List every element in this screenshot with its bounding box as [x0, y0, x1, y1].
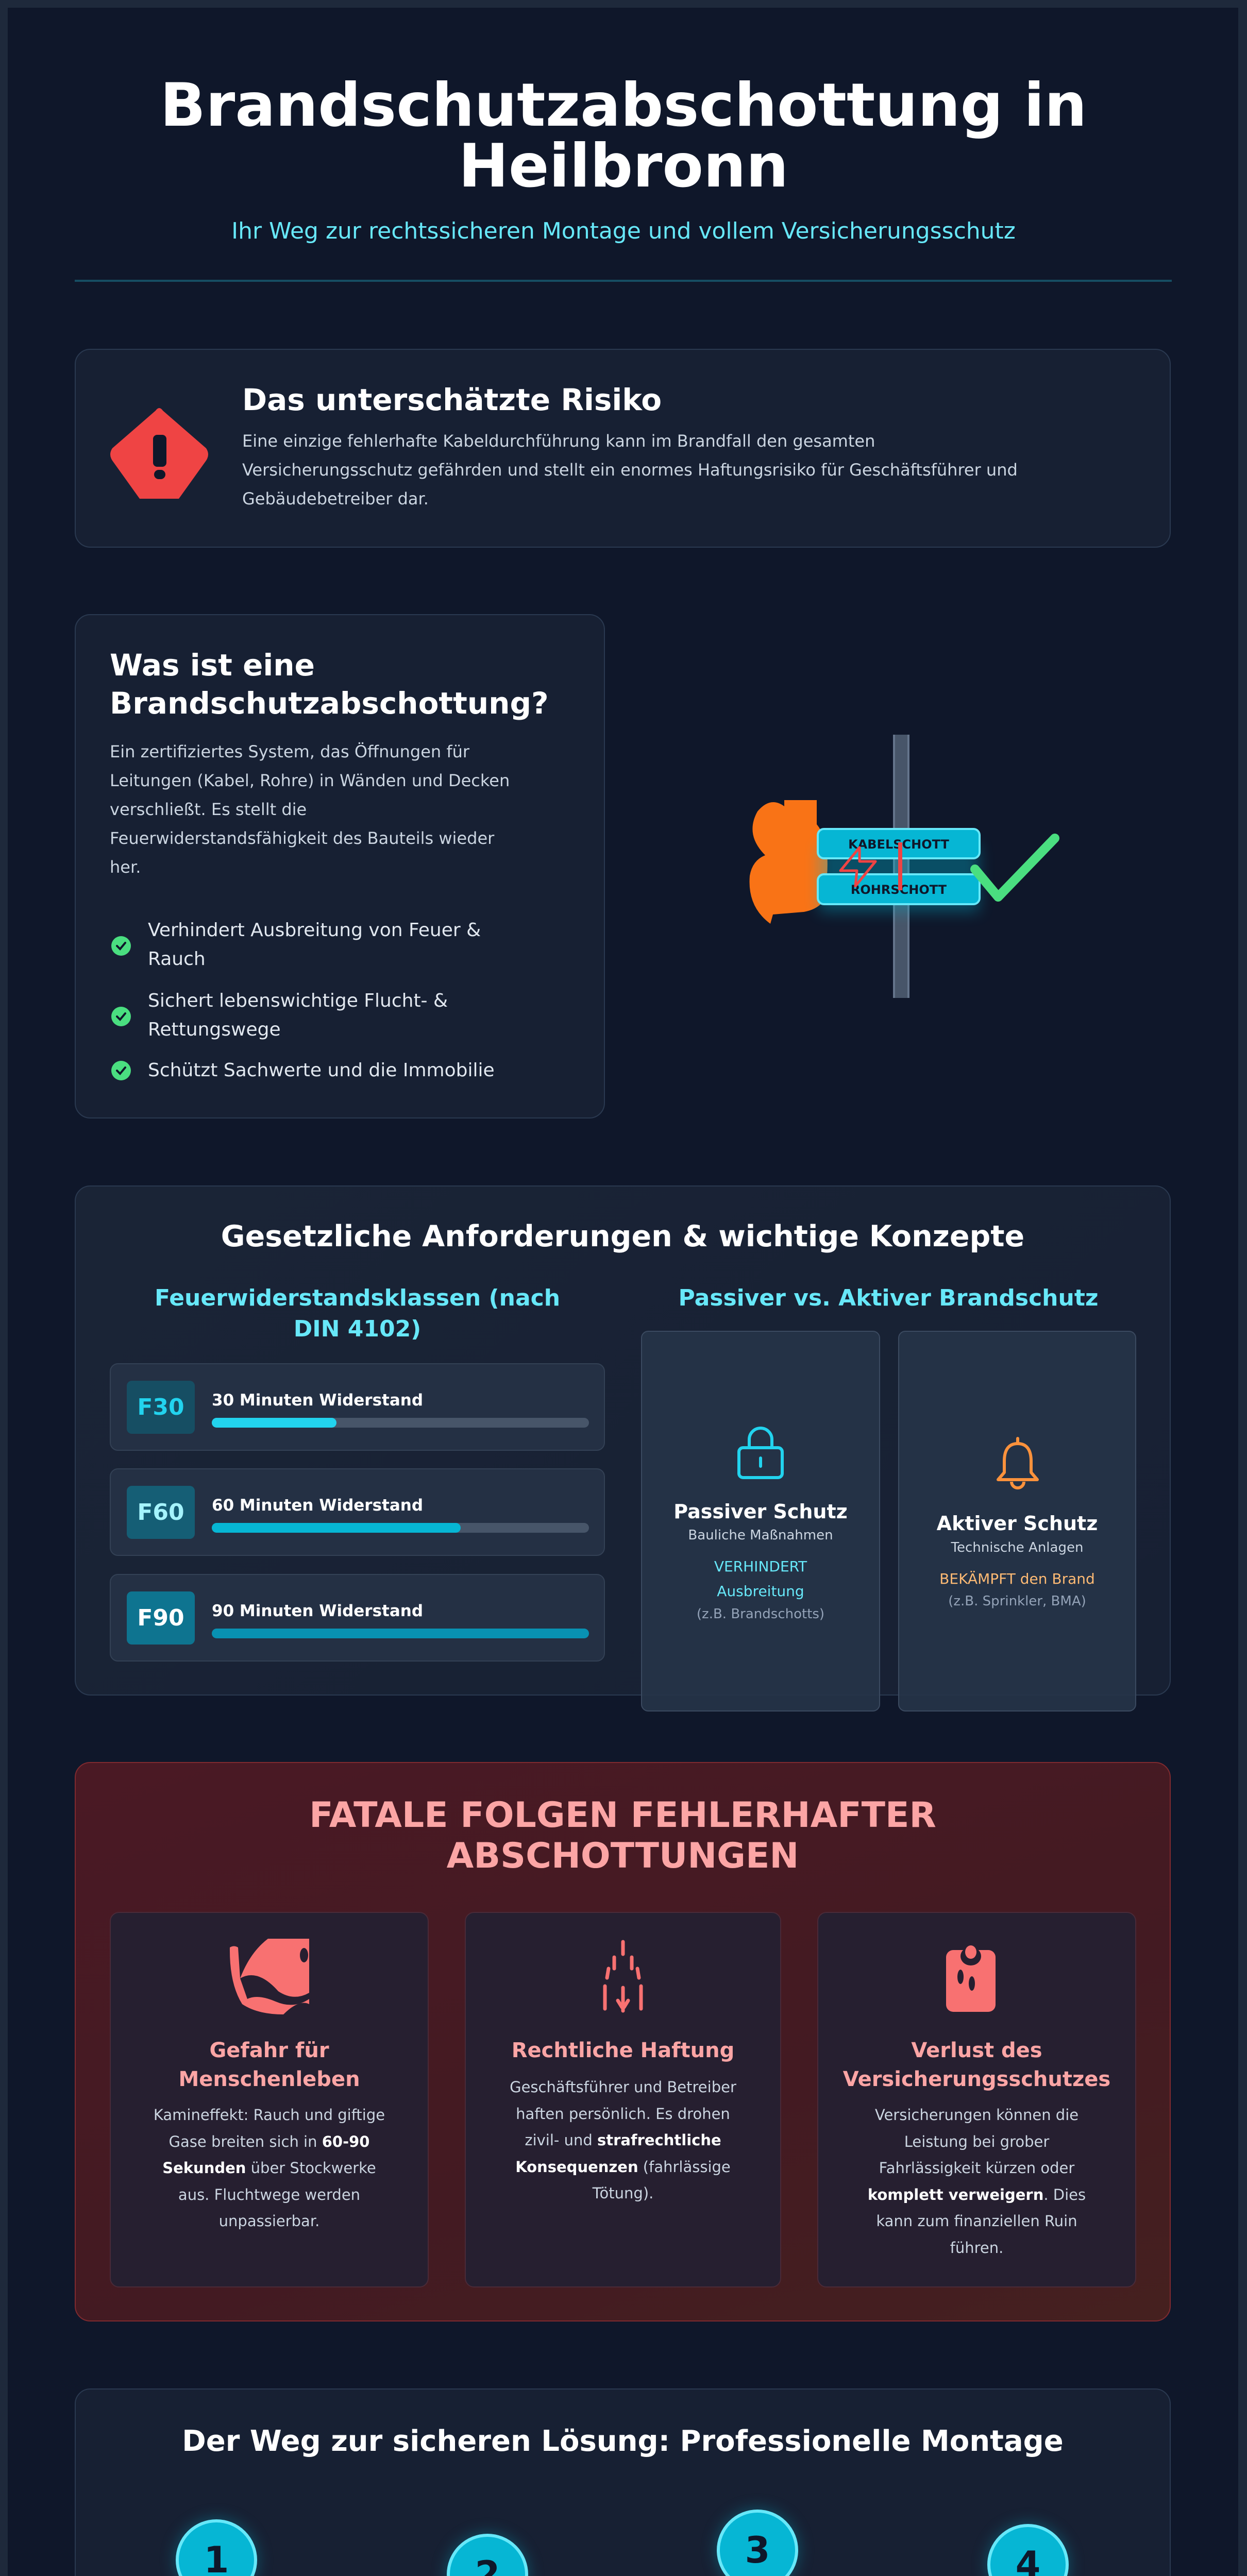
heading: legal: Gesetzliche Anforderungen & wichtige Konzepte: [221, 1219, 1024, 1253]
glow: [819, 845, 979, 912]
text: aus. Fluchtwege werden: [178, 2185, 360, 2203]
text: [510, 2078, 736, 2202]
text: risk: [242, 431, 1018, 509]
text: Gase breiten sich in 60-90: [169, 2133, 369, 2150]
fire: [749, 800, 828, 924]
icon: lock: [737, 1427, 784, 1479]
heading: Versicherungsschutzes: [843, 2067, 1110, 2091]
heading: what is: [110, 648, 549, 721]
panel: active protection: [898, 1331, 1136, 1711]
text: komplett verweigern. Dies: [868, 2185, 1086, 2203]
text: definition: Ein zertifiziertes System, das Öffnungen für: [110, 742, 469, 761]
panel: risk: [75, 349, 1171, 548]
subheading: fire resistance classes: Feuerwiderstandsklassen (nach: [155, 1285, 560, 1311]
text: Fahrlässigkeit kürzen oder: [879, 2159, 1074, 2177]
text: Sekunden über Stockwerke: [162, 2159, 376, 2177]
panel: active protection: Technische Anlagen: [951, 1540, 1083, 1555]
lightning: [840, 848, 875, 886]
check: [975, 838, 1055, 897]
text: risk: Eine einzige fehlerhafte Kabeldurchführung kann im Brandfall den gesamten: [242, 431, 875, 451]
text: risk: Versicherungsschutz gefährden und stellt ein enormes Haftungsrisiko für Geschäftsführer und: [242, 460, 1018, 480]
icon: warning: [110, 408, 208, 499]
heading: Verlust des: [911, 2039, 1042, 2062]
bullet 1: Verhindert Ausbreitung von Feuer &: [148, 920, 481, 941]
card: legal liability: [465, 1912, 781, 2287]
text: kann zum finanziellen Ruin: [876, 2212, 1077, 2230]
title: Heilbronn: [459, 131, 788, 201]
text: [868, 2106, 1086, 2257]
subtitle: Ihr Weg zur rechtssicheren Montage und vollem Versicherungsschutz: [231, 218, 1016, 244]
bar: F90: 90 Minuten Widerstand: [212, 1602, 423, 1620]
bar: F30: 30 Minuten Widerstand: [212, 1391, 423, 1410]
text: [154, 2106, 385, 2230]
wall: [893, 735, 909, 998]
bullet 1: [111, 920, 481, 970]
bar: F30: [110, 1363, 605, 1451]
bar: F30: F30: [137, 1394, 184, 1420]
bar: F60: 60 Minuten Widerstand: [212, 1496, 423, 1515]
text: Konsequenzen (fahrlässige: [515, 2158, 731, 2175]
heading: Menschenleben: [178, 2067, 360, 2091]
ROHRSCHOTT box: [818, 874, 980, 904]
text: definition: Feuerwiderstandsfähigkeit des Bauteils wieder: [110, 828, 494, 848]
bullet 2: [111, 990, 448, 1040]
panel: active protection: Aktiver Schutz: [937, 1512, 1098, 1535]
bullet 2: Rettungswege: [148, 1019, 281, 1040]
icon: insurance: [946, 1945, 996, 2012]
list: benefits: [111, 920, 495, 1081]
KABELSCHOTT box: [818, 829, 980, 858]
panel: active protection: BEKÄMPFT den Brand: [939, 1570, 1095, 1587]
illustration: fire stop wall: [749, 735, 1059, 998]
bullet 2: Sichert lebenswichtige Flucht- &: [148, 990, 448, 1011]
text: zivil- und strafrechtliche: [525, 2131, 721, 2149]
panel: process steps: [75, 2388, 1171, 2576]
bullet 3: Schützt Sachwerte und die Immobilie: [148, 1060, 495, 1081]
panel: passive protection: Ausbreitung: [717, 1583, 804, 1600]
panel: fatal consequences: [75, 1762, 1171, 2321]
heading: what is: Brandschutzabschottung?: [110, 686, 549, 721]
bar: F60: [110, 1468, 605, 1556]
text: Geschäftsführer und Betreiber: [510, 2078, 736, 2096]
bullet 1: Rauch: [148, 948, 206, 970]
heading: what is: Was ist eine: [110, 648, 315, 683]
text: definition: her.: [110, 857, 141, 877]
title: [160, 71, 1087, 201]
text: definition: verschließt. Es stellt die: [110, 800, 307, 819]
bar: F90: F90: [137, 1605, 184, 1631]
heading: fatal: FATALE FOLGEN FEHLERHAFTER: [309, 1795, 936, 1836]
bar: F60: F60: [137, 1499, 184, 1526]
text: Versicherungen können die: [875, 2106, 1079, 2124]
text: Leistung bei grober: [904, 2133, 1049, 2150]
step 3: 3: [745, 2529, 770, 2571]
heading: Rechtliche Haftung: [512, 2039, 734, 2062]
text: definition: Leitungen (Kabel, Rohre) in Wänden und Decken: [110, 771, 510, 790]
illustration: fire stop wall: ROHRSCHOTT: [851, 883, 947, 897]
text: unpassierbar.: [219, 2212, 319, 2230]
panel: passive protection: Bauliche Maßnahmen: [688, 1528, 833, 1543]
heading: fatal: ABSCHOTTUNGEN: [447, 1836, 799, 1876]
subheading: fire resistance classes: DIN 4102): [294, 1316, 421, 1342]
panel: passive protection: VERHINDERT: [714, 1558, 807, 1575]
card: loss of insurance: [817, 1912, 1136, 2287]
panel: passive protection: (z.B. Brandschotts): [697, 1606, 824, 1622]
text: definition: [110, 742, 510, 877]
text: führen.: [950, 2239, 1003, 2257]
panel: passive protection: Passiver Schutz: [673, 1500, 848, 1523]
text: Tötung).: [593, 2184, 653, 2202]
heading: risk: Das unterschätzte Risiko: [242, 382, 662, 417]
icon: danger: [230, 1939, 309, 2014]
subheading: passive vs active: Passiver vs. Aktiver Brandschutz: [679, 1285, 1098, 1311]
heading: [843, 2039, 1110, 2091]
illustration: fire stop wall: KABELSCHOTT: [848, 837, 950, 852]
panel: what is: [75, 614, 605, 1118]
text: risk: Gebäudebetreiber dar.: [242, 489, 429, 509]
text: haften persönlich. Es drohen: [516, 2105, 730, 2123]
subheading: fire resistance classes: [155, 1285, 560, 1342]
title: Brandschutzabschottung in: [160, 71, 1087, 140]
text: Kamineffekt: Rauch und giftige: [154, 2106, 385, 2124]
card: danger to life: [110, 1912, 429, 2287]
heading: process: Der Weg zur sicheren Lösung: Professionelle Montage: [182, 2425, 1064, 2458]
bar: F90: [110, 1574, 605, 1662]
heading: fatal: [309, 1795, 936, 1876]
panel: legal requirements: [75, 1185, 1171, 1696]
icon: liability: [603, 1940, 643, 2012]
panel: active protection: (z.B. Sprinkler, BMA): [948, 1594, 1086, 1609]
heading: Gefahr für: [209, 2039, 329, 2062]
icon: bell: [997, 1437, 1039, 1489]
panel: passive protection: [641, 1331, 880, 1711]
heading: [178, 2039, 360, 2091]
